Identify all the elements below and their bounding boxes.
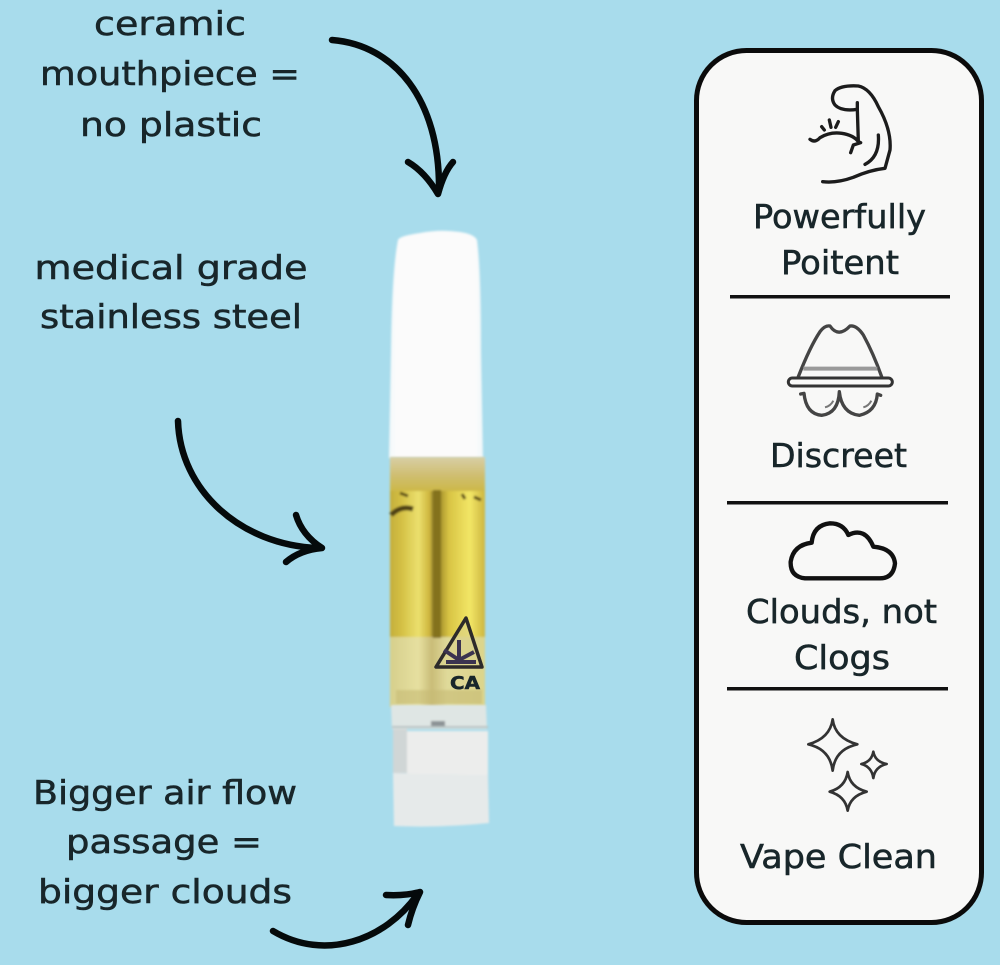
heading: clouds, not clogs: Clouds, not	[746, 592, 937, 631]
text: air flow label	[33, 773, 297, 911]
heading: powerfully poitent: Poitent	[781, 243, 899, 282]
icon: flexed arm	[810, 86, 890, 182]
text: stainless steel label	[34, 248, 308, 336]
text: ceramic mouthpiece label	[40, 4, 300, 144]
text: ceramic mouthpiece label: no plastic	[80, 105, 262, 144]
cartridge base	[391, 705, 489, 827]
text: air flow label: passage =	[66, 822, 262, 861]
icon: hat and glasses	[788, 326, 892, 415]
heading: powerfully poitent: Powerfully	[753, 197, 926, 236]
text: air flow label: bigger clouds	[38, 872, 292, 911]
heading: vape clean: Vape Clean	[740, 837, 937, 876]
arrow: to steel tube	[178, 421, 322, 562]
cartridge ceramic mouthpiece	[389, 231, 483, 458]
cartridge compliance triangle and CA mark: CA	[450, 673, 480, 694]
heading: powerfully poitent	[753, 197, 926, 282]
icon: sparkles	[808, 719, 887, 811]
cartridge oil tank	[390, 457, 485, 707]
vape cartridge	[389, 231, 489, 827]
cartridge compliance triangle and CA mark	[436, 618, 482, 694]
heading: clouds, not clogs	[746, 592, 937, 677]
panel: benefits	[696, 50, 982, 922]
arrow: to mouthpiece	[332, 40, 453, 194]
text: stainless steel label: medical grade	[34, 248, 308, 287]
text: stainless steel label: stainless steel	[40, 297, 302, 336]
icon: cloud	[791, 523, 895, 578]
heading: clouds, not clogs: Clogs	[794, 638, 890, 677]
text: ceramic mouthpiece label: mouthpiece =	[40, 54, 300, 93]
text: ceramic mouthpiece label: ceramic	[94, 4, 246, 43]
text: air flow label: Bigger air flow	[33, 773, 297, 812]
heading: discreet: Discreet	[770, 436, 907, 475]
arrow: to base	[273, 892, 420, 945]
